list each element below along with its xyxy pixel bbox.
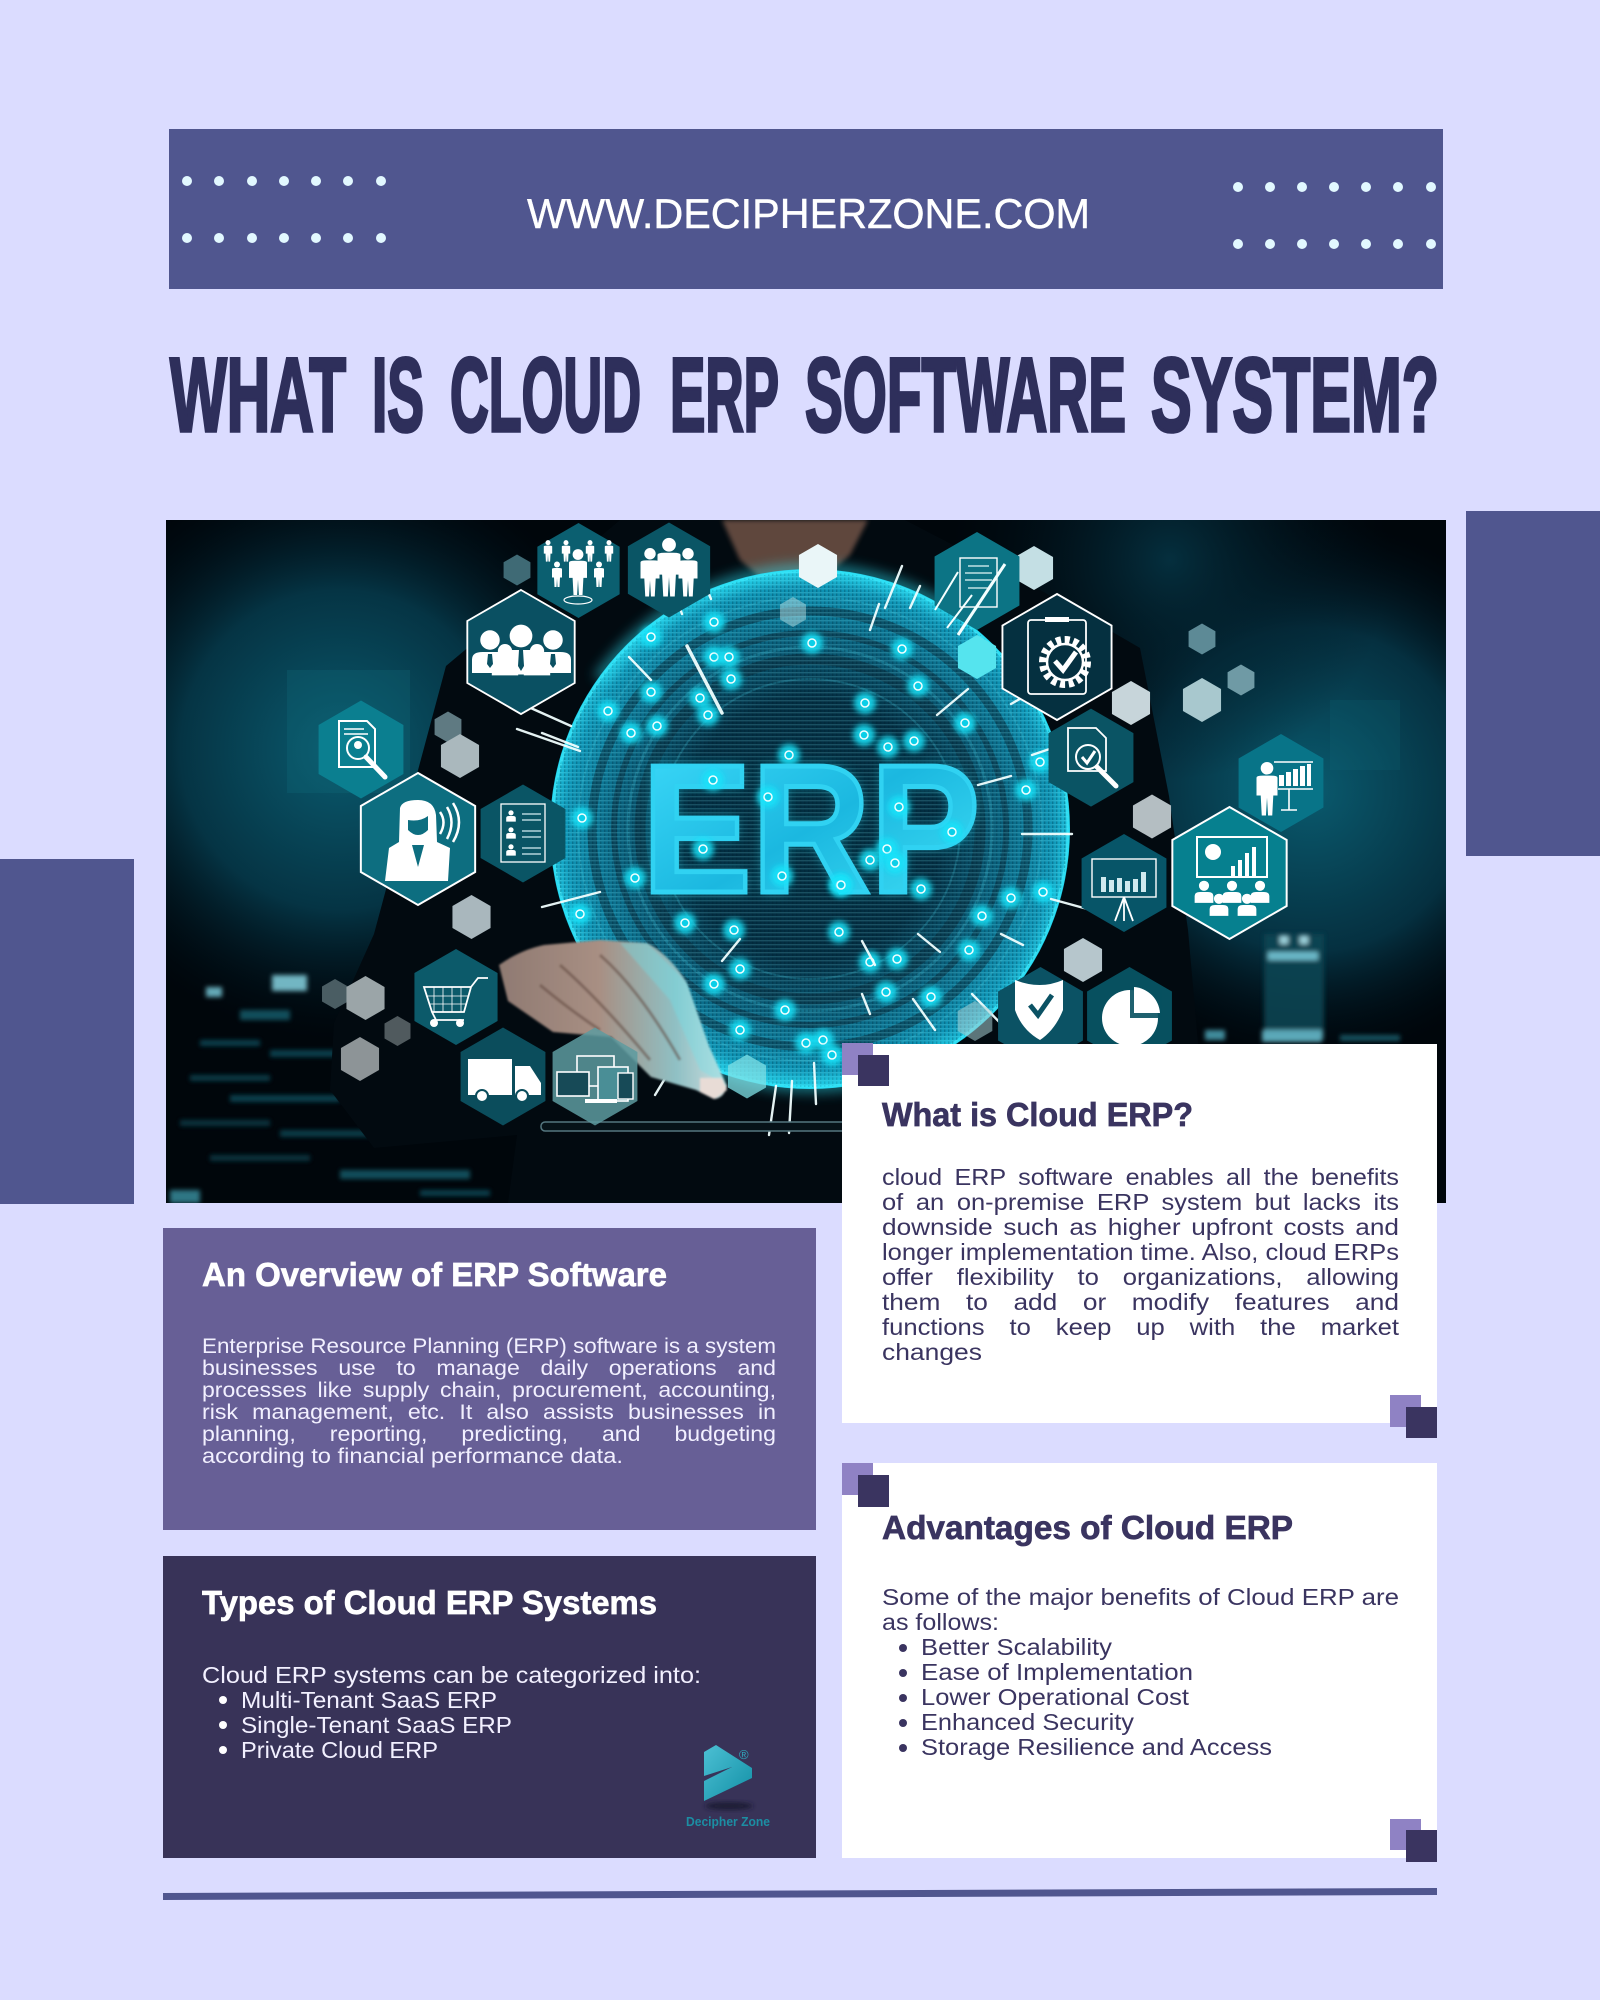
small plain hexagons — [322, 544, 1254, 1098]
panel: overview of ERP software — [163, 1228, 816, 1530]
body text: overview: processes like supply chain, procurement, accounting, — [202, 1379, 776, 1402]
icon: presentation board — [1082, 834, 1166, 932]
body text: overview: businesses use to manage daily operations and — [202, 1357, 776, 1380]
icon: shopping cart — [414, 949, 498, 1045]
icon: document check magnifier — [1049, 709, 1133, 807]
pointing hand — [499, 940, 727, 1099]
title: CLOUD — [450, 337, 641, 454]
body text: what is cloud ERP — [882, 1164, 1400, 1365]
title: IS — [372, 337, 424, 454]
title: ERP — [670, 337, 779, 454]
body text: what is cloud ERP: longer implementation time. Also, cloud ERPs — [882, 1239, 1399, 1265]
body text: advantages: Storage Resilience and Access — [921, 1734, 1272, 1760]
corner squares top — [842, 1463, 889, 1507]
body text: overview: planning, reporting, predicting, and budgeting — [202, 1423, 776, 1446]
logo: Decipher Zone: ® — [739, 1747, 749, 1762]
title: SOFTWARE — [805, 337, 1126, 454]
globe data nodes — [569, 611, 1054, 1066]
ERP lettering — [646, 758, 982, 901]
body text: advantages: Ease of Implementation — [921, 1659, 1193, 1685]
title: WHAT — [170, 337, 346, 454]
body text: advantages: Lower Operational Cost — [921, 1684, 1190, 1710]
tablet edge — [541, 1122, 871, 1131]
icon: document search — [319, 700, 403, 798]
dots left — [182, 176, 386, 243]
body text: what is cloud ERP: of an on-premise ERP system but lacks its — [882, 1189, 1399, 1215]
heading: what is cloud ERP: What is Cloud ERP? — [882, 1096, 1193, 1133]
icon: clipboard gear check — [1002, 594, 1112, 720]
icon: support agent — [361, 773, 475, 905]
body text: advantages: Some of the major benefits of Cloud ERP are — [882, 1584, 1399, 1610]
ERP lettering: ERP — [642, 726, 980, 931]
body text: what is cloud ERP: functions to keep up with the market — [882, 1314, 1400, 1340]
heading: overview: An Overview of ERP Software — [202, 1256, 667, 1293]
panel: types of cloud ERP systems — [163, 1556, 816, 1858]
body text: overview — [202, 1335, 776, 1468]
icon: team group — [467, 590, 575, 714]
body text: what is cloud ERP: cloud ERP software enables all the benefits — [882, 1164, 1399, 1190]
body text: what is cloud ERP: changes — [882, 1339, 982, 1365]
dots right — [1233, 182, 1436, 249]
logo: Decipher Zone: Decipher Zone — [686, 1814, 770, 1829]
corner squares bottom — [1390, 1819, 1437, 1862]
website address: WWW.DECIPHERZONE.COM — [527, 190, 1090, 237]
decorative block left — [0, 859, 134, 1204]
globe — [517, 566, 1113, 1135]
city lights left — [170, 975, 490, 1203]
body text: types — [202, 1662, 701, 1763]
panel: what is cloud ERP — [842, 1043, 1437, 1438]
icon: profile list — [481, 784, 565, 882]
hero image: ERP illustration — [166, 520, 1446, 1203]
icon: three men — [628, 522, 710, 618]
body text: what is cloud ERP: offer flexibility to organizations, allowing — [882, 1264, 1399, 1290]
body text: advantages — [882, 1584, 1399, 1760]
person: suit and chin — [332, 594, 1192, 1138]
heading: types: Types of Cloud ERP Systems — [202, 1584, 657, 1621]
body text: types: Multi-Tenant SaaS ERP — [241, 1687, 497, 1713]
body text: types: Private Cloud ERP — [241, 1737, 438, 1763]
icon: shield handshake — [998, 967, 1083, 1044]
icon: audience and chart — [1172, 807, 1287, 939]
icon: people network — [537, 523, 620, 618]
title — [170, 337, 1439, 454]
city lights right — [1205, 934, 1400, 1042]
corner squares bottom — [1390, 1395, 1437, 1438]
panel: advantages of cloud ERP — [842, 1463, 1437, 1862]
footer rule — [163, 1888, 1437, 1900]
icon: delivery truck — [461, 1028, 545, 1126]
decorative block right — [1466, 511, 1600, 856]
globe light streaks — [517, 566, 1113, 1135]
body text: overview: Enterprise Resource Planning (ERP) software is a system — [202, 1335, 776, 1358]
body text: advantages: Better Scalability — [921, 1634, 1113, 1660]
icon: document and pen — [935, 532, 1019, 635]
logo: Decipher Zone — [686, 1745, 770, 1829]
body text: overview: risk management, etc. It also assists businesses in — [202, 1401, 776, 1424]
heading: advantages: Advantages of Cloud ERP — [882, 1509, 1293, 1546]
corner squares top — [842, 1043, 889, 1086]
icon: presenter with bars — [1239, 734, 1323, 832]
body text: what is cloud ERP: them to add or modify features and — [882, 1289, 1399, 1315]
body text: advantages: as follows: — [882, 1609, 999, 1635]
body text: what is cloud ERP: downside such as higher upfront costs and — [882, 1214, 1399, 1240]
icon: devices — [553, 1028, 637, 1126]
body text: types: Cloud ERP systems can be categorized into: — [202, 1662, 701, 1688]
body text: types: Single-Tenant SaaS ERP — [241, 1712, 512, 1738]
icon: pie chart — [1087, 967, 1172, 1044]
body text: advantages: Enhanced Security — [921, 1709, 1135, 1735]
ERP lettering: ERP — [642, 726, 980, 931]
body text: overview: according to financial performance data. — [202, 1445, 623, 1468]
header banner — [169, 129, 1443, 289]
